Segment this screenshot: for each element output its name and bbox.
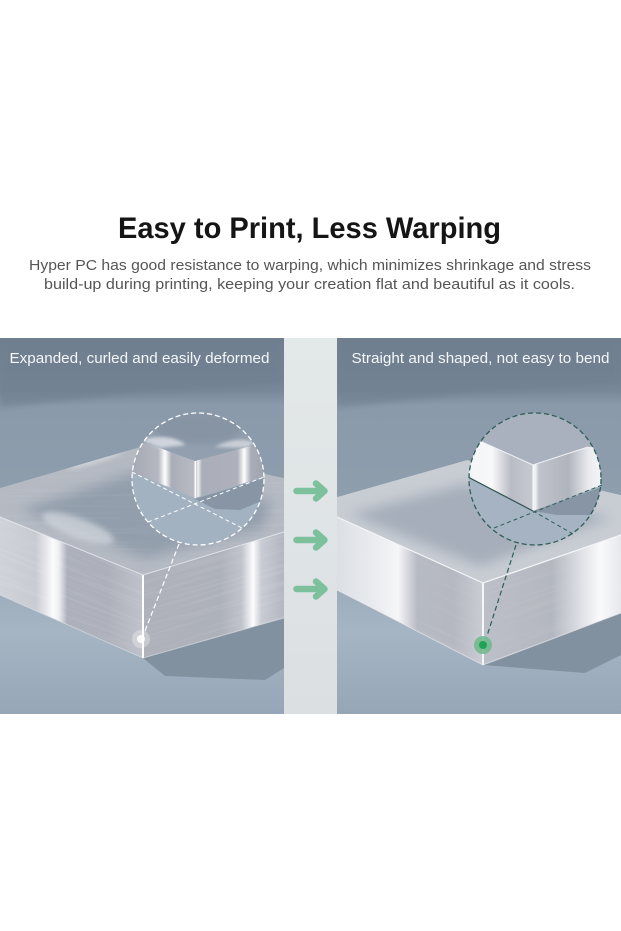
- arrow 3: [296, 582, 324, 596]
- title: Easy to Print, Less Warping: [118, 212, 501, 245]
- panel: flat print (right): [337, 338, 621, 714]
- description text: Hyper PC has good resistance to warping, which minimizes shrinkage and stress: [29, 258, 591, 274]
- arrow 2: [296, 532, 324, 548]
- magnifier: warped corner: [130, 411, 266, 547]
- magnifier: flat corner: [466, 411, 604, 547]
- flat slab right face: [484, 536, 621, 664]
- warped slab right face: [144, 532, 284, 657]
- warped slab top surface: [0, 440, 284, 580]
- arrows: [296, 484, 324, 596]
- panel caption: Straight and shaped, not easy to bend: [352, 350, 610, 367]
- center strip: [284, 338, 337, 714]
- warped slab left face: [0, 517, 142, 658]
- connector and marker dot: [474, 545, 516, 654]
- arrow 1: [296, 484, 324, 498]
- connector and marker dot: [132, 544, 179, 648]
- flat slab left face: [337, 518, 482, 664]
- description text: [29, 258, 591, 293]
- flat slab top surface: [337, 460, 621, 583]
- panel caption: Expanded, curled and easily deformed: [10, 350, 270, 367]
- shadow under flat slab: [483, 612, 621, 673]
- shadow under warped slab: [143, 615, 284, 680]
- panel: warped print (left): [0, 338, 284, 714]
- magnifier dashed lines: [494, 485, 602, 534]
- magnifier dashed lines: [132, 472, 264, 528]
- description text: build-up during printing, keeping your creation flat and beautiful as it cools.: [44, 277, 575, 293]
